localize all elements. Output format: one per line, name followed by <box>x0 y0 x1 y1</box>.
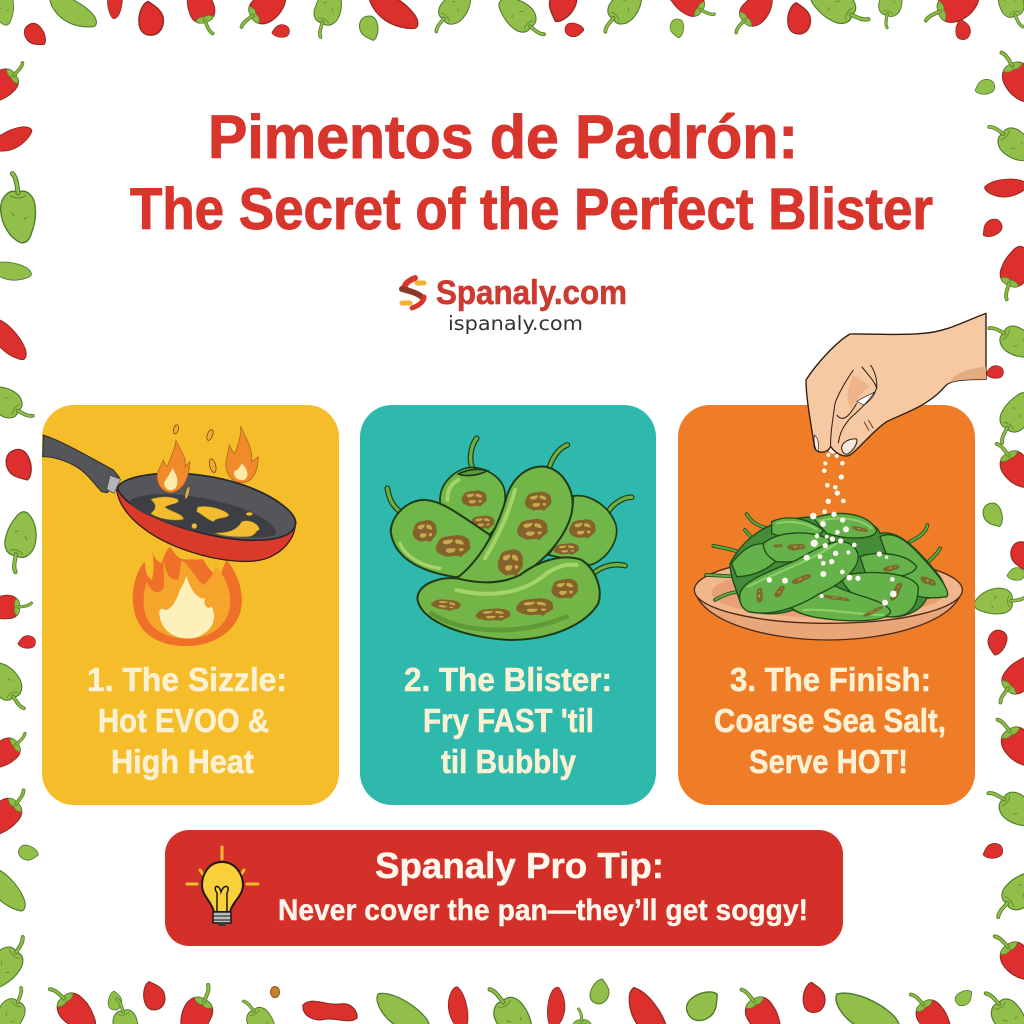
step 2 label: til Bubbly <box>441 743 577 780</box>
step 2 label: Fry FAST 'til <box>423 702 594 739</box>
panel: step 2 the blister <box>360 405 656 805</box>
panel: step 3 the finish <box>678 313 986 805</box>
pepper highlights <box>748 518 883 615</box>
icon: big flame <box>133 547 242 646</box>
border: left peppers <box>0 56 44 993</box>
dark pepper mass <box>730 515 945 619</box>
tip heading: Spanaly Pro Tip: <box>375 845 664 886</box>
logo wordmark: Spanaly.com <box>436 274 627 312</box>
salt <box>767 446 897 606</box>
border: bottom peppers <box>0 977 1024 1024</box>
left pepper <box>387 488 490 577</box>
logo <box>402 274 627 335</box>
step 1 label: High Heat <box>111 743 254 780</box>
step 3 label: 3. The Finish: <box>730 661 931 698</box>
icon: light bulb <box>187 847 258 926</box>
middle pepper <box>457 445 573 583</box>
callout: pro tip <box>165 830 843 946</box>
sparks <box>173 424 217 500</box>
border: top peppers <box>0 0 1024 51</box>
step 2 label: 2. The Blister: <box>404 661 612 698</box>
thumbnail <box>842 439 857 454</box>
logo url: ispanaly.com <box>448 312 583 335</box>
title: Pimentos de Padrón: <box>208 103 798 171</box>
blisters <box>756 525 937 618</box>
front pepper <box>417 557 625 640</box>
step 1 label <box>87 661 287 780</box>
pan floor <box>130 494 276 538</box>
small pan flames <box>157 426 258 493</box>
icon: hand <box>806 313 986 456</box>
stems <box>706 514 940 600</box>
icon: pan handle <box>43 435 119 493</box>
step 1 label: Hot EVOO & <box>98 702 269 739</box>
illustration: hand salting plate of peppers <box>694 313 986 640</box>
step 3 label: Serve HOT! <box>749 743 908 780</box>
step 1 label: 1. The Sizzle: <box>87 661 287 698</box>
back peppers <box>440 438 632 565</box>
step 2 label <box>404 661 612 780</box>
icon: logo mark <box>402 278 424 308</box>
title <box>130 103 933 242</box>
pan rim <box>117 473 296 540</box>
tip body: Never cover the pan—they’ll get soggy! <box>278 894 808 927</box>
title: The Secret of the Perfect Blister <box>130 177 933 242</box>
pan ferrule <box>107 475 121 493</box>
plate <box>694 557 962 640</box>
pan body <box>117 490 295 561</box>
border: right peppers <box>973 45 1024 989</box>
plated peppers <box>706 514 948 621</box>
step 3 label: Coarse Sea Salt, <box>714 702 946 739</box>
panel: step 1 the sizzle <box>42 405 339 805</box>
oil <box>151 497 259 537</box>
illustration: pan and flames <box>43 424 296 646</box>
illustration: blistered peppers <box>387 438 632 640</box>
step 3 label <box>714 661 946 780</box>
